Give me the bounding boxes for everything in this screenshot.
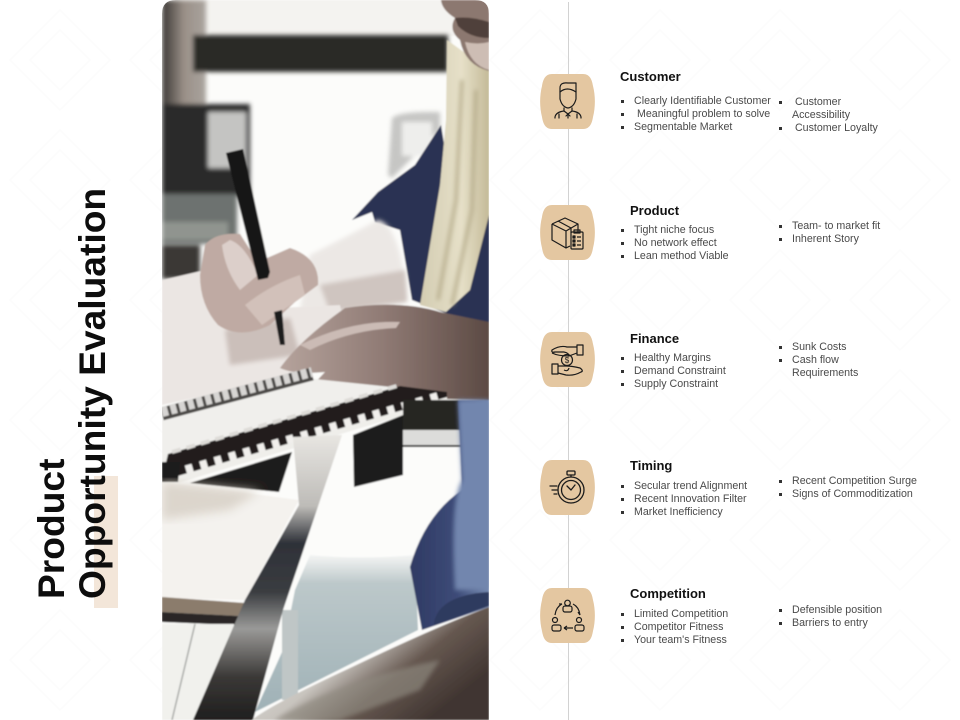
row: product <box>540 203 880 262</box>
row: competition <box>540 586 882 646</box>
list: product left: No network effect <box>634 237 717 249</box>
list: timing right <box>779 475 917 500</box>
second hand <box>280 305 489 400</box>
list: product left <box>621 224 729 262</box>
list: customer right: Customer <box>795 96 841 108</box>
table leg band <box>193 435 342 720</box>
photo: woman writing in notebook <box>162 0 489 720</box>
list: timing right: Signs of Commoditization <box>792 488 913 500</box>
writing arm <box>300 220 407 312</box>
icon: hands with coin <box>540 332 595 387</box>
list: customer left: Segmentable Market <box>634 121 732 133</box>
list: finance right: Cash flow <box>792 354 839 366</box>
list: competition left <box>621 608 728 646</box>
row: customer <box>540 69 878 134</box>
timeline line <box>568 2 569 720</box>
list: customer left: Meaningful problem to solve <box>637 108 770 120</box>
list: finance left: Healthy Margins <box>634 352 711 364</box>
row: timing <box>540 458 917 518</box>
list: product left: Lean method Viable <box>634 250 729 262</box>
list: product right <box>779 220 880 245</box>
list: timing left: Recent Innovation Filter <box>634 493 747 505</box>
jeans <box>255 555 418 712</box>
list: competition left: Competitor Fitness <box>634 621 723 633</box>
title highlight bar <box>94 476 118 608</box>
icon: box and clipboard <box>540 205 595 260</box>
list: finance left: Demand Constraint <box>634 365 726 377</box>
heading: product: Product <box>630 203 679 218</box>
bottom-left paper <box>162 624 234 720</box>
title: Opportunity Evaluation <box>71 188 113 599</box>
list: timing left: Secular trend Alignment <box>634 480 747 492</box>
icon: hands with coin: $ <box>565 356 570 365</box>
list: customer left: Clearly Identifiable Customer <box>634 95 771 107</box>
face <box>441 0 489 71</box>
list: finance right <box>779 341 858 379</box>
table top <box>162 496 298 600</box>
list: customer right <box>779 96 878 134</box>
list: customer right: Customer Loyalty <box>795 122 878 134</box>
list: customer left <box>621 95 771 133</box>
pen <box>226 149 270 280</box>
heading: customer: Customer <box>620 69 681 84</box>
notebook paper <box>162 270 350 405</box>
list: competition left: Limited Competition <box>634 608 728 620</box>
spiral two <box>162 386 447 480</box>
list: competition right: Defensible position <box>792 604 882 616</box>
list: finance right: Sunk Costs <box>792 341 846 353</box>
dark gap under notebook <box>190 452 292 492</box>
list: finance right: Requirements <box>792 367 858 379</box>
title: Product <box>30 458 72 599</box>
list: competition right: Barriers to entry <box>792 617 868 629</box>
icon: stopwatch <box>540 460 595 515</box>
window background <box>162 0 489 720</box>
list: competition left: Your team's Fitness <box>634 634 727 646</box>
writing hand <box>200 234 318 332</box>
icon: person <box>540 74 595 129</box>
list: product left: Tight niche focus <box>634 224 714 236</box>
list: competition right <box>779 604 882 629</box>
list: customer right: Accessibility <box>792 109 850 121</box>
spiral one <box>162 374 312 414</box>
icon: team cycle <box>540 588 595 643</box>
list: product right: Inherent Story <box>792 233 859 245</box>
list: finance left: Supply Constraint <box>634 378 718 390</box>
heading: competition: Competition <box>630 586 706 601</box>
shirt lower <box>410 400 489 630</box>
notebook lower page <box>162 378 389 462</box>
list: timing left: Market Inefficiency <box>634 506 723 518</box>
knee <box>252 607 489 720</box>
window frame <box>162 0 448 279</box>
heading: finance: Finance <box>630 331 679 346</box>
list: timing left <box>621 480 747 518</box>
table edge <box>162 597 245 616</box>
shirt upper <box>352 125 489 330</box>
heading: timing: Timing <box>630 458 672 473</box>
row: finance <box>540 331 858 390</box>
list: finance left <box>621 352 726 390</box>
list: product right: Team- to market fit <box>792 220 880 232</box>
title <box>30 188 113 599</box>
list: timing right: Recent Competition Surge <box>792 475 917 487</box>
hair <box>420 40 489 312</box>
